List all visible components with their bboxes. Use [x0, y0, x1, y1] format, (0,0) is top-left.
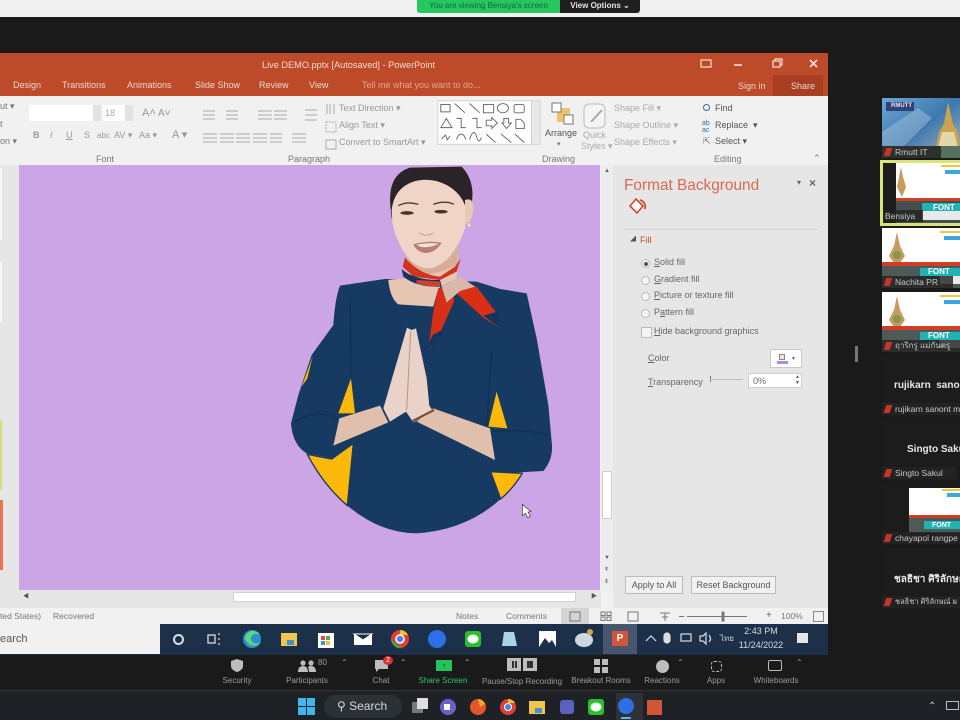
- name tag: [882, 146, 941, 158]
- vertical scrollbar: ▼: [604, 555, 610, 561]
- fill options: Pattern fill: [654, 307, 694, 317]
- fill options: Picture or texture fill: [654, 290, 734, 300]
- reactions: ⌃: [677, 658, 684, 667]
- name tag: Singto Sakul: [895, 468, 943, 478]
- vertical scrollbar: ▲: [604, 168, 610, 174]
- participant: rujikarn sanont: [882, 356, 960, 416]
- name tag: rujikarn sanont m: [895, 404, 960, 414]
- participants: Participants: [286, 676, 328, 685]
- apply to all button: Apply to All: [632, 580, 676, 590]
- drawing group: Shape Fill ▾: [614, 103, 661, 113]
- font group: A˄: [142, 107, 156, 119]
- campus temple photo: [882, 98, 960, 158]
- transparency row: ▲: [795, 374, 800, 380]
- reactions: [644, 658, 684, 685]
- shared slide preview: [882, 292, 960, 352]
- fill section heading: Fill: [640, 235, 652, 245]
- share screen: ⌃: [464, 658, 471, 667]
- apply to all button: [625, 576, 683, 594]
- clipboard group remnants: ut ▾: [0, 101, 15, 111]
- editing group: [702, 103, 758, 164]
- FONT label: FONT: [928, 267, 950, 276]
- dress and arms: [291, 279, 552, 533]
- format background pane: ◢: [630, 237, 636, 243]
- share button: [773, 75, 823, 96]
- share screen: [418, 658, 471, 685]
- editing group: Find: [715, 103, 733, 113]
- participant: Thai display name: [882, 549, 960, 609]
- apps: [707, 661, 725, 685]
- FONT label: FONT: [932, 522, 951, 529]
- horizontal scrollbar: [19, 590, 601, 608]
- format background pane: ×: [809, 176, 816, 190]
- ribbon: ⌃: [813, 153, 821, 163]
- name tag: ฤาริกรู แม่กันตรู: [895, 341, 950, 350]
- shared slide preview: [909, 488, 960, 533]
- paragraph group: Paragraph: [288, 154, 330, 164]
- pause and stop recording: [482, 658, 562, 686]
- active powerpoint icon: [603, 624, 637, 654]
- shared slide preview: [883, 163, 960, 223]
- scarf: [402, 258, 501, 349]
- tray chevron: ⌃: [928, 701, 936, 712]
- ribbon tabs: Design: [13, 80, 41, 90]
- participants: 80: [318, 658, 327, 667]
- taskbar app icons: [412, 693, 662, 720]
- drawing group: Shape Outline ▾: [614, 120, 678, 130]
- whiteboards: Whiteboards: [754, 676, 798, 685]
- ribbon tabs: Review: [259, 80, 289, 90]
- vertical scrollbar: [601, 165, 613, 590]
- name tag: chayapol rangpe: [895, 533, 958, 543]
- breakout rooms: [571, 659, 631, 685]
- illustration: woman greeting with wai on yellow circle: [291, 166, 552, 534]
- drawing group: [438, 100, 678, 164]
- participant: chayapol rangpe: [882, 484, 960, 545]
- neck shadow: [407, 245, 458, 275]
- hair: [390, 167, 472, 218]
- status bar: Comments: [506, 611, 547, 621]
- font group: Font: [96, 154, 114, 164]
- editing group: Select ▾: [715, 136, 747, 146]
- quick styles button: [584, 104, 606, 128]
- viewing notice: [417, 0, 560, 13]
- vertical scrollbar: ⇟: [604, 579, 609, 585]
- status bar: +: [766, 610, 772, 621]
- font group: A ▾: [172, 129, 187, 141]
- screen sharing banner: [417, 0, 640, 13]
- pause and stop recording: Pause/Stop Recording: [482, 677, 562, 686]
- eyes and brows: [398, 202, 454, 206]
- praying hands: [383, 328, 433, 422]
- search box: earch: [0, 633, 28, 645]
- transparency row: Transparency: [648, 377, 703, 387]
- color row: Color: [648, 353, 670, 363]
- format background pane: [613, 165, 828, 608]
- chat: 2: [386, 657, 390, 664]
- window controls: [700, 58, 818, 68]
- horizontal scrollbar: ◀: [23, 594, 29, 600]
- ribbon: [0, 96, 828, 165]
- share screen: ↑: [442, 661, 446, 670]
- clipboard group remnants: [0, 101, 17, 146]
- garment seams: [295, 298, 548, 435]
- participants: ⌃: [341, 658, 348, 667]
- whiteboards: ⌃: [796, 658, 803, 667]
- editing group: ab: [702, 120, 710, 127]
- pane close controls: ▾: [797, 178, 801, 187]
- apps: Apps: [707, 676, 725, 685]
- view options: View Options ⌄: [570, 1, 630, 10]
- font group: S: [84, 130, 90, 140]
- participant: Singto Sakul: [882, 420, 960, 480]
- active powerpoint icon: P: [617, 633, 623, 644]
- font group: 18: [105, 108, 115, 118]
- drawing group: ▾: [557, 141, 561, 148]
- panel resize handle: [855, 346, 858, 362]
- ribbon tabs: [13, 80, 481, 90]
- icon: paint bucket: [629, 198, 646, 214]
- search box: [0, 624, 160, 654]
- viewing notice: You are viewing Bensiya's screen: [429, 1, 548, 10]
- drawing group: Quick: [583, 130, 606, 140]
- icon: cortana circle: [173, 634, 184, 645]
- status bar: [0, 608, 828, 624]
- clipboard group remnants: t: [0, 119, 3, 129]
- status bar: Notes: [456, 611, 478, 621]
- name tag: [882, 340, 960, 352]
- search pill: ⚲ Search: [337, 699, 387, 713]
- reset background button: [691, 576, 776, 594]
- face: [392, 180, 466, 268]
- ear and earring: [465, 199, 473, 224]
- paragraph group: Align Text ▾: [339, 120, 385, 130]
- font group: [29, 105, 188, 164]
- shared windows taskbar: [0, 624, 828, 655]
- keyboard icon: [946, 701, 959, 710]
- ribbon tabs: Slide Show: [195, 80, 240, 90]
- shapes gallery: [438, 100, 540, 145]
- editing group: Replace ▾: [715, 120, 758, 130]
- watch: [413, 410, 434, 421]
- font group: U: [66, 130, 72, 140]
- font group: B: [33, 130, 40, 140]
- paragraph group: [203, 103, 426, 164]
- ribbon tabs: View: [309, 80, 328, 90]
- font group: abc: [97, 131, 110, 140]
- transparency row: 0%: [753, 376, 766, 386]
- pinned apps: [243, 629, 593, 648]
- name tag: Bensiya: [885, 211, 915, 221]
- zoom top bar: [0, 0, 960, 17]
- breakout rooms: Breakout Rooms: [571, 676, 631, 685]
- icon: windows start: [298, 698, 315, 715]
- drawing group: Drawing: [542, 154, 575, 164]
- powerpoint window: [0, 53, 828, 624]
- name tag: Nachita PR: [895, 277, 938, 287]
- fill options: Gradient fill: [654, 274, 700, 284]
- ribbon tabs: Transitions: [62, 80, 106, 90]
- sign in: Sign in: [738, 81, 766, 91]
- logo text: RMUTT: [891, 103, 912, 109]
- paragraph group: Text Direction ▾: [339, 103, 401, 113]
- share button: Share: [791, 81, 815, 91]
- paragraph group: Convert to SmartArt ▾: [339, 137, 426, 147]
- fill options: Solid fill: [654, 257, 685, 267]
- icon: task view: [207, 633, 220, 645]
- document title: Live DEMO.pptx [Autosaved] - PowerPoint: [262, 60, 435, 70]
- font group: AV ▾: [114, 130, 132, 140]
- forearms: [333, 406, 495, 460]
- name tag: ชลธิชา ศิริลักษณ์ ผ: [895, 597, 957, 606]
- arrange button: [552, 102, 574, 124]
- slide canvas: [19, 165, 600, 590]
- clipboard group remnants: on ▾: [0, 136, 17, 146]
- drawing group: Styles ▾: [581, 141, 613, 151]
- chat: [372, 656, 407, 685]
- ribbon tabs: Tell me what you want to do...: [362, 80, 481, 90]
- font group: A˅: [158, 108, 171, 119]
- status bar: 100%: [781, 611, 803, 621]
- transparency row: ▼: [795, 380, 800, 386]
- font group: Aa ▾: [139, 130, 157, 140]
- horizontal scrollbar: ▶: [591, 594, 597, 600]
- participant: Bensiya active speaker: [880, 160, 960, 226]
- yellow circle segments: [302, 357, 522, 506]
- name tag: [882, 596, 960, 608]
- reactions: Reactions: [644, 676, 680, 685]
- name tag: Rmutt IT: [895, 147, 928, 157]
- system tray: [646, 632, 712, 646]
- editing group: Editing: [714, 154, 742, 164]
- pane title: Format Background: [624, 177, 759, 194]
- status bar: ted States): [0, 611, 41, 621]
- chat: ⌃: [400, 658, 407, 667]
- participant: Rmutt IT: [882, 98, 960, 158]
- title bar: [0, 53, 828, 96]
- chat: Chat: [373, 676, 389, 685]
- date: 11/24/2022: [739, 640, 783, 650]
- whiteboards: [754, 658, 803, 685]
- share screen: Share Screen: [419, 676, 467, 685]
- vertical scrollbar: ⇞: [604, 567, 609, 573]
- editing group: ac: [702, 127, 709, 134]
- reset background button: Reset Background: [696, 580, 771, 590]
- keyboard language: ไทย: [720, 634, 734, 643]
- fill options: [641, 257, 759, 338]
- FONT label: FONT: [928, 331, 950, 340]
- editing group: ⇱: [703, 136, 711, 146]
- name tag: [882, 467, 957, 479]
- drawing group: Shape Effects ▾: [614, 137, 677, 147]
- drawing group: Arrange: [545, 128, 577, 138]
- security: [222, 659, 252, 685]
- mouse cursor: [522, 504, 531, 518]
- FONT label: FONT: [933, 203, 955, 212]
- name tag: [882, 403, 960, 415]
- local windows taskbar: [0, 691, 960, 720]
- ribbon tabs: Animations: [127, 80, 172, 90]
- participant: Thai-named attendee with slide: [882, 292, 960, 352]
- zoom meeting toolbar: [0, 655, 960, 691]
- transparency row: [648, 373, 802, 388]
- participants: [286, 658, 348, 685]
- search pill: [324, 695, 402, 718]
- name tag: [882, 276, 953, 288]
- color row: [648, 349, 802, 368]
- color row: ▾: [792, 356, 795, 362]
- fill options: Hide background graphics: [654, 326, 759, 336]
- participant: Nachita PR: [882, 228, 960, 288]
- security: Security: [223, 676, 251, 685]
- notification icon: [797, 633, 808, 643]
- nose and mouth: [419, 233, 433, 235]
- name tag: [883, 210, 923, 222]
- shared slide preview: [882, 228, 960, 288]
- slide thumbnails pane: [0, 165, 19, 608]
- clock: 2:43 PM: [744, 626, 778, 636]
- font group: I: [50, 130, 53, 140]
- name tag: [882, 532, 960, 544]
- neck and chest: [388, 253, 458, 307]
- status bar: Recovered: [53, 611, 94, 621]
